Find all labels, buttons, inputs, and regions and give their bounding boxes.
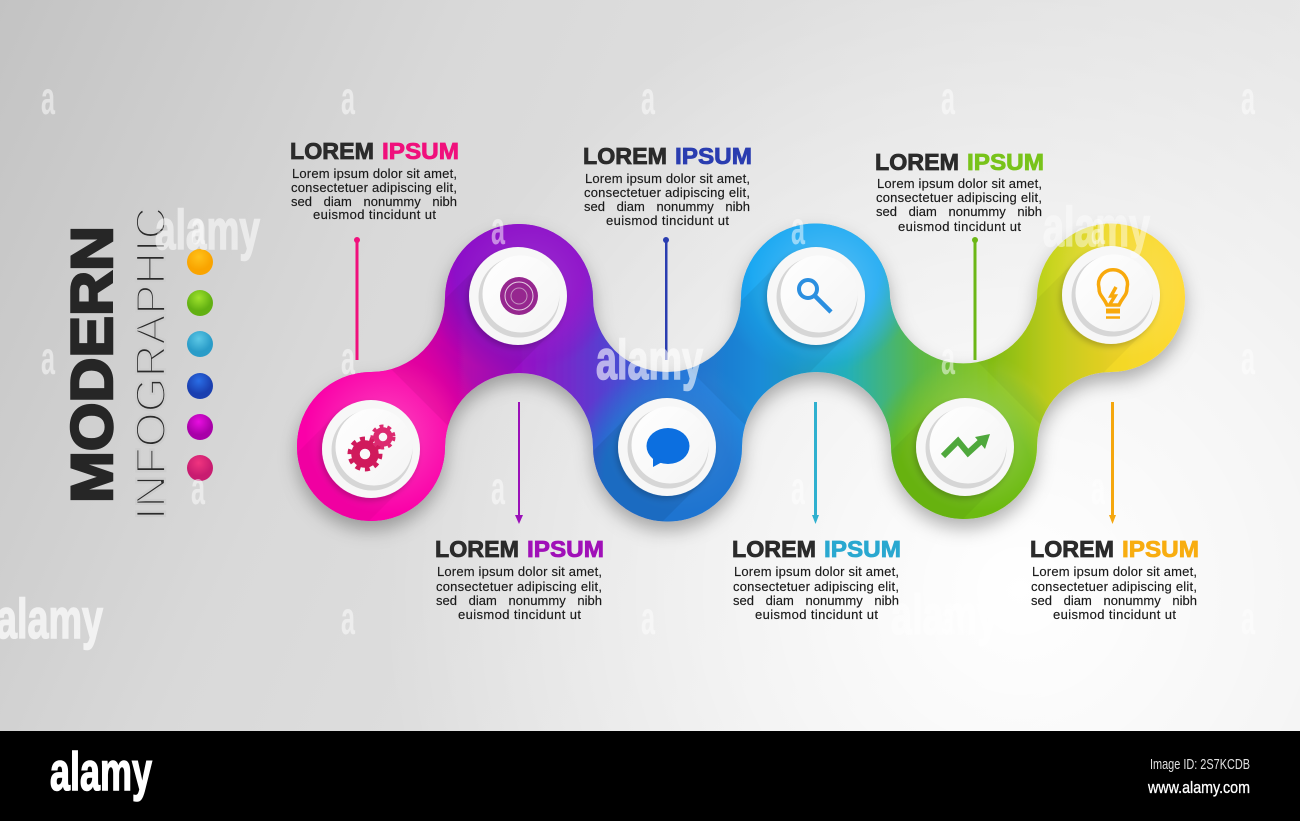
line 5 teal bbox=[812, 402, 819, 524]
heading 3: LOREM bbox=[875, 149, 959, 175]
colour dots legend bbox=[187, 249, 213, 481]
image id: Image ID: 2S7KCDB bbox=[1150, 756, 1250, 773]
disc 3 with chat icon bbox=[618, 398, 716, 496]
body 5: euismod tincidunt ut bbox=[755, 607, 878, 622]
body 6: consectetuer adipiscing elit, bbox=[1031, 579, 1197, 594]
body 2: consectetuer adipiscing elit, bbox=[584, 185, 750, 200]
line 1 pink bbox=[354, 237, 360, 360]
text block 2 bbox=[583, 143, 752, 228]
watermarks: a bbox=[1241, 72, 1255, 124]
watermarks: alamy bbox=[596, 328, 703, 391]
body 4: Lorem ipsum dolor sit amet, bbox=[437, 564, 602, 579]
heading 5 bbox=[732, 536, 901, 562]
body 3 bbox=[876, 176, 1042, 234]
heading 4: LOREM bbox=[435, 536, 519, 562]
line 6 orange bbox=[1109, 402, 1116, 524]
heading 2: LOREM bbox=[583, 143, 667, 169]
body 5: consectetuer adipiscing elit, bbox=[733, 579, 899, 594]
disc 5 with growth arrow icon bbox=[916, 398, 1014, 496]
heading 5: IPSUM bbox=[824, 536, 901, 562]
icon: light bulb bbox=[1098, 270, 1128, 318]
heading 5: LOREM bbox=[732, 536, 816, 562]
line 3 green bbox=[972, 237, 978, 360]
heading 6: LOREM bbox=[1030, 536, 1114, 562]
watermarks: a bbox=[791, 462, 805, 514]
disc 2 with target icon bbox=[469, 247, 567, 345]
body 1: Lorem ipsum dolor sit amet, bbox=[292, 166, 457, 181]
heading 4 bbox=[435, 536, 604, 562]
watermarks: a bbox=[41, 72, 55, 124]
watermarks: a bbox=[941, 332, 955, 384]
body 1: sed diam nonummy nibh bbox=[291, 194, 457, 209]
body 1 bbox=[291, 166, 457, 222]
watermarks: a bbox=[941, 72, 955, 124]
watermarks bbox=[0, 72, 1255, 650]
text block 3 bbox=[875, 149, 1044, 234]
watermarks: a bbox=[191, 462, 205, 514]
body 3: Lorem ipsum dolor sit amet, bbox=[877, 176, 1042, 191]
watermarks: a bbox=[341, 592, 355, 644]
icon: target bbox=[500, 277, 538, 315]
icon: chat bubble bbox=[646, 428, 690, 467]
heading 1: IPSUM bbox=[382, 138, 459, 164]
body 3: euismod tincidunt ut bbox=[898, 219, 1021, 234]
heading 1: LOREM bbox=[290, 138, 374, 164]
body 5 bbox=[733, 564, 899, 622]
footer logo: alamy bbox=[50, 742, 152, 802]
body 4 bbox=[436, 564, 602, 622]
body 2 bbox=[584, 171, 750, 228]
watermarks: a bbox=[941, 592, 955, 644]
icon: magnifier bbox=[799, 280, 831, 312]
watermarks: a bbox=[1091, 462, 1105, 514]
body 6: euismod tincidunt ut bbox=[1053, 607, 1176, 622]
text block 1 bbox=[290, 138, 459, 222]
footer bar bbox=[0, 731, 1300, 821]
watermarks: alamy bbox=[0, 587, 103, 650]
heading 6 bbox=[1030, 536, 1199, 562]
text block 6 bbox=[1030, 536, 1199, 622]
body 2: euismod tincidunt ut bbox=[606, 213, 729, 228]
disc 6 with bulb icon bbox=[1062, 246, 1160, 344]
watermarks: a bbox=[641, 72, 655, 124]
heading 6: IPSUM bbox=[1122, 536, 1199, 562]
heading 2 bbox=[583, 143, 752, 169]
icon: rising arrow bbox=[943, 434, 990, 456]
watermarks: alamy bbox=[155, 198, 260, 261]
website: www.alamy.com bbox=[1147, 778, 1250, 797]
body 4: euismod tincidunt ut bbox=[458, 607, 581, 622]
body 3: consectetuer adipiscing elit, bbox=[876, 190, 1042, 205]
subtitle: INFOGRAPHIC: INFOGRAPHIC bbox=[127, 207, 174, 520]
watermarks: a bbox=[341, 332, 355, 384]
body 6 bbox=[1031, 564, 1197, 622]
watermarks: a bbox=[41, 332, 55, 384]
watermarks: alamy bbox=[1043, 195, 1150, 258]
connector lines bbox=[354, 237, 1116, 524]
body 1: euismod tincidunt ut bbox=[313, 207, 436, 222]
watermarks: a bbox=[191, 202, 205, 254]
heading 3: IPSUM bbox=[967, 149, 1044, 175]
body 1: consectetuer adipiscing elit, bbox=[291, 180, 457, 195]
body 3: sed diam nonummy nibh bbox=[876, 204, 1042, 219]
text block 5 bbox=[732, 536, 901, 622]
icon: gears bbox=[350, 426, 394, 470]
watermarks: a bbox=[1091, 202, 1105, 254]
disc 4 with magnifier icon bbox=[767, 247, 865, 345]
body 6: Lorem ipsum dolor sit amet, bbox=[1032, 564, 1197, 579]
line 4 purple bbox=[515, 402, 523, 524]
heading 3 bbox=[875, 149, 1044, 175]
text block 4 bbox=[435, 536, 604, 622]
body 2: Lorem ipsum dolor sit amet, bbox=[585, 171, 750, 186]
title: MODERN: MODERN bbox=[60, 226, 125, 503]
gradient ribbon bbox=[288, 222, 1195, 540]
watermarks: a bbox=[341, 72, 355, 124]
heading 4: IPSUM bbox=[527, 536, 604, 562]
body 6: sed diam nonummy nibh bbox=[1031, 593, 1197, 608]
heading 2: IPSUM bbox=[675, 143, 752, 169]
heading 1 bbox=[290, 138, 459, 164]
body 2: sed diam nonummy nibh bbox=[584, 199, 750, 214]
line 2 navy bbox=[663, 237, 669, 360]
watermarks: a bbox=[491, 462, 505, 514]
disc 1 with gear icon bbox=[322, 400, 420, 498]
watermarks: a bbox=[1241, 592, 1255, 644]
watermarks: a bbox=[791, 202, 805, 254]
body 4: consectetuer adipiscing elit, bbox=[436, 579, 602, 594]
body 5: Lorem ipsum dolor sit amet, bbox=[734, 564, 899, 579]
body 4: sed diam nonummy nibh bbox=[436, 593, 602, 608]
body 5: sed diam nonummy nibh bbox=[733, 593, 899, 608]
watermarks: a bbox=[1241, 332, 1255, 384]
watermarks: a bbox=[491, 202, 505, 254]
watermarks: a bbox=[641, 592, 655, 644]
watermarks: alamy bbox=[891, 583, 998, 646]
